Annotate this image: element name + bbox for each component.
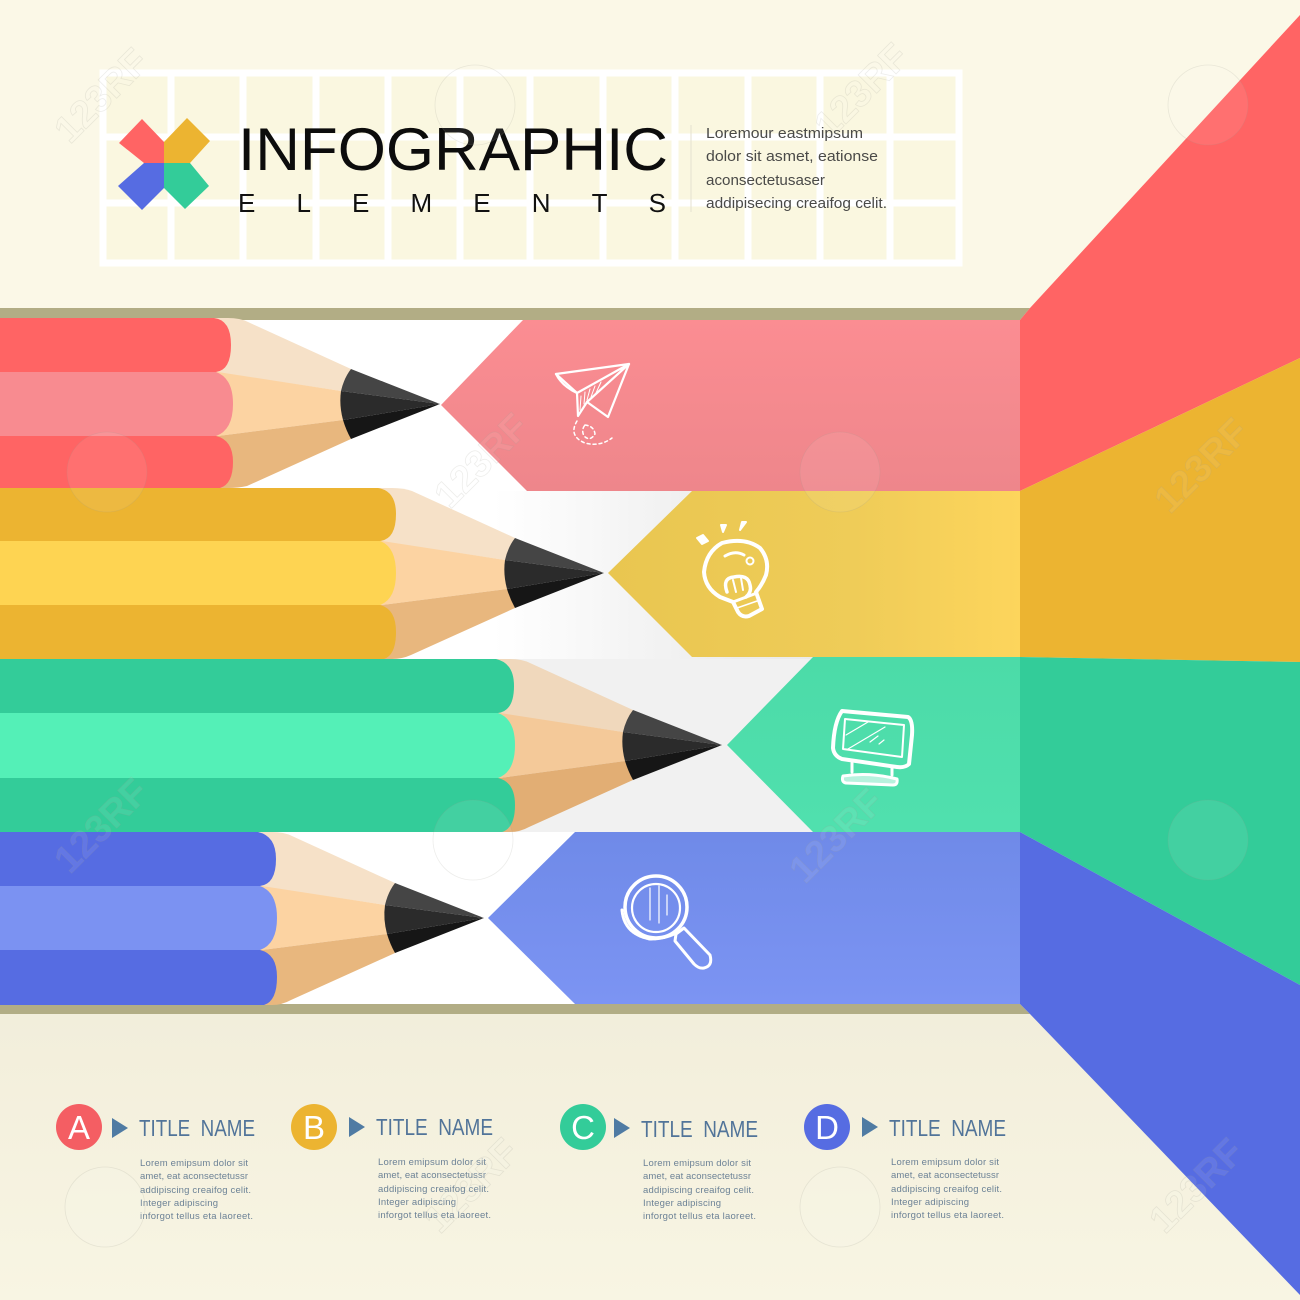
stock photo watermarks: 123RF (47, 771, 157, 881)
legend D: Integer adipiscing (891, 1197, 969, 1208)
legend B: Integer adipiscing (378, 1197, 456, 1208)
wall: blue (1020, 832, 1300, 1295)
title (238, 116, 668, 218)
legend A (56, 1104, 255, 1222)
legend C: amet, eat aconsectetussr (643, 1171, 751, 1182)
arrow banner: red (441, 320, 1020, 491)
wall: green (1020, 657, 1300, 985)
grid panel behind header (103, 73, 959, 263)
legend C: TITLE NAME (641, 1116, 758, 1142)
title: ELEMENTS (238, 188, 666, 218)
legend D (804, 1104, 1006, 1221)
header description: addipisecing creaifog celit. (706, 196, 887, 212)
legend B: amet, eat aconsectetussr (378, 1170, 486, 1181)
legend C: addipiscing creaifog celit. (643, 1185, 754, 1196)
legend B (291, 1104, 493, 1221)
pencil: blue (0, 832, 484, 1005)
legend C: Integer adipiscing (643, 1198, 721, 1209)
header description: Loremour eastmipsum (706, 126, 863, 142)
header description: dolor sit asmet, eationse (706, 149, 878, 165)
legend B: Lorem emipsum dolor sit (378, 1157, 486, 1168)
legend A: A (68, 1109, 90, 1146)
stock photo watermarks: 123RF (1147, 411, 1257, 521)
top shelf line (0, 308, 1030, 320)
arrow banner: blue (488, 832, 1020, 1004)
legend D: amet, eat aconsectetussr (891, 1170, 999, 1181)
icon: computer monitor (833, 711, 912, 785)
icon: magnifying glass (622, 876, 711, 968)
arrow banner: yellow (608, 491, 1020, 657)
header description: aconsectetusaser (706, 173, 825, 189)
legend A: inforgot tellus eta laoreet. (140, 1211, 253, 1222)
icon: light bulb (697, 522, 767, 616)
legend A: Lorem emipsum dolor sit (140, 1158, 248, 1169)
wall: yellow (1020, 358, 1300, 662)
wall: red (1020, 15, 1300, 491)
legend D: inforgot tellus eta laoreet. (891, 1210, 1004, 1221)
legend A: amet, eat aconsectetussr (140, 1171, 248, 1182)
legend A: TITLE NAME (139, 1115, 255, 1141)
pencil: yellow (0, 488, 604, 659)
stock photo watermarks: 123RF (1142, 1131, 1252, 1241)
bottom shelf line (0, 1004, 1030, 1014)
icon: header logo (118, 118, 210, 210)
stock photo watermarks: 123RF (427, 406, 537, 516)
legend C (560, 1104, 758, 1222)
stock photo watermarks: 123RF (417, 1131, 527, 1241)
arrow banner: green (727, 657, 1020, 832)
legend B: addipiscing creaifog celit. (378, 1184, 489, 1195)
legend A: addipiscing creaifog celit. (140, 1185, 251, 1196)
legend C: inforgot tellus eta laoreet. (643, 1211, 756, 1222)
legend D: D (815, 1109, 839, 1146)
legend C: Lorem emipsum dolor sit (643, 1158, 751, 1169)
legend D: TITLE NAME (889, 1115, 1006, 1141)
legend C: C (571, 1109, 595, 1146)
stock photo watermarks: 123RF (47, 41, 157, 151)
title: INFOGRAPHIC (238, 116, 668, 183)
legend D: Lorem emipsum dolor sit (891, 1157, 999, 1168)
legend B: TITLE NAME (376, 1114, 493, 1140)
legend A: Integer adipiscing (140, 1198, 218, 1209)
pencil: red (0, 318, 440, 488)
legend B: B (303, 1109, 325, 1146)
header description (691, 125, 887, 212)
icon: paper plane (556, 364, 629, 444)
legend D: addipiscing creaifog celit. (891, 1184, 1002, 1195)
stock photo watermarks: 123RF (782, 781, 892, 891)
center white panel (0, 320, 1020, 1004)
pencil: green (0, 659, 722, 832)
legend B: inforgot tellus eta laoreet. (378, 1210, 491, 1221)
stock photo watermarks: 123RF (807, 36, 917, 146)
